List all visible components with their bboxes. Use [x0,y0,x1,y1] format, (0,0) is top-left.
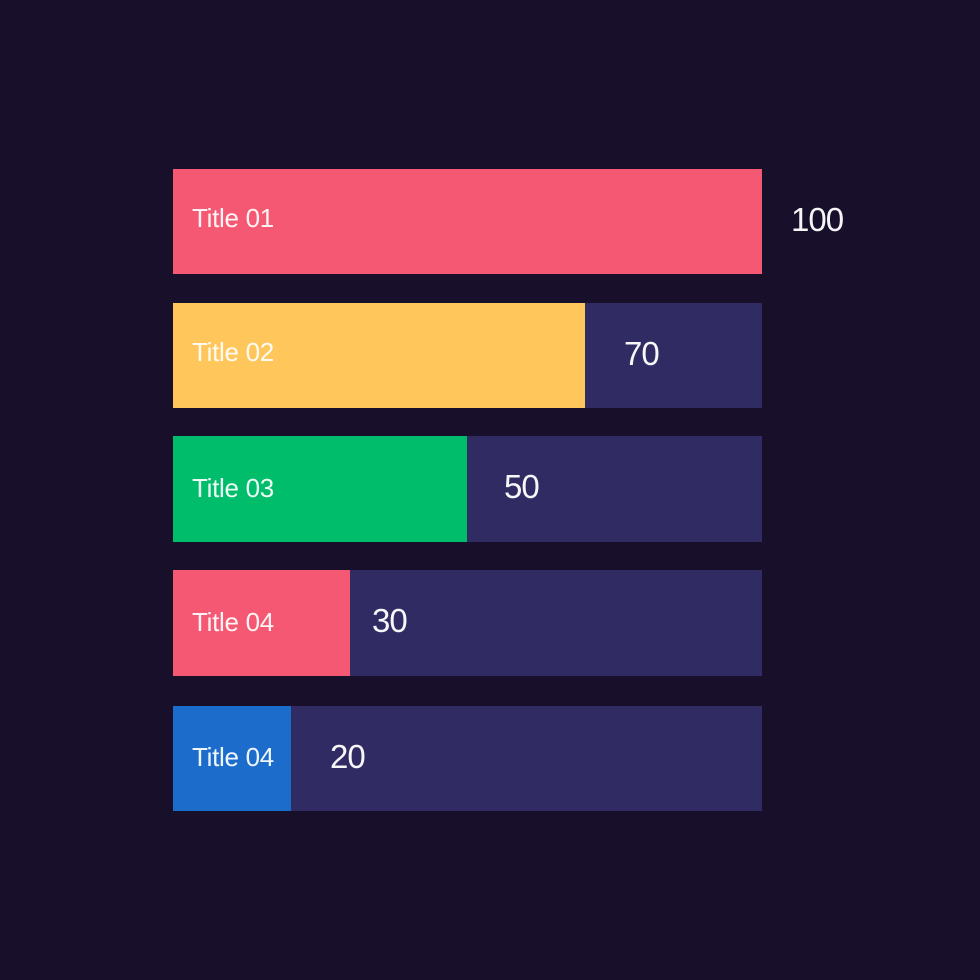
value: 20: 20 [330,738,365,775]
value: 50: 50 [504,468,539,505]
track: Title 02 [173,303,762,408]
row: Title 01 [173,169,843,274]
track: Title 03 [173,436,762,542]
track: Title 04 second [173,706,762,811]
track: Title 04 first [173,570,762,676]
row: Title 03 [173,436,762,542]
bar: Title 03 value 50 [173,436,467,542]
row: Title 04 first [173,570,762,676]
row: Title 04 second [173,706,762,811]
label: Title 04 first: Title 04 [192,607,274,637]
label: Title 03: Title 03 [192,473,274,503]
bar: Title 04 value 20 [173,706,291,811]
label: Title 02: Title 02 [192,337,274,367]
value: 70: 70 [624,335,659,372]
label: Title 04 second: Title 04 [192,742,274,772]
label: Title 01: Title 01 [192,203,274,233]
bar: Title 04 value 30 [173,570,350,676]
bar: Title 02 value 70 [173,303,585,408]
bar: Title 01 value 100 [173,169,762,274]
value: 30: 30 [372,602,407,639]
row: Title 02 [173,303,762,408]
value: 100: 100 [791,201,843,238]
